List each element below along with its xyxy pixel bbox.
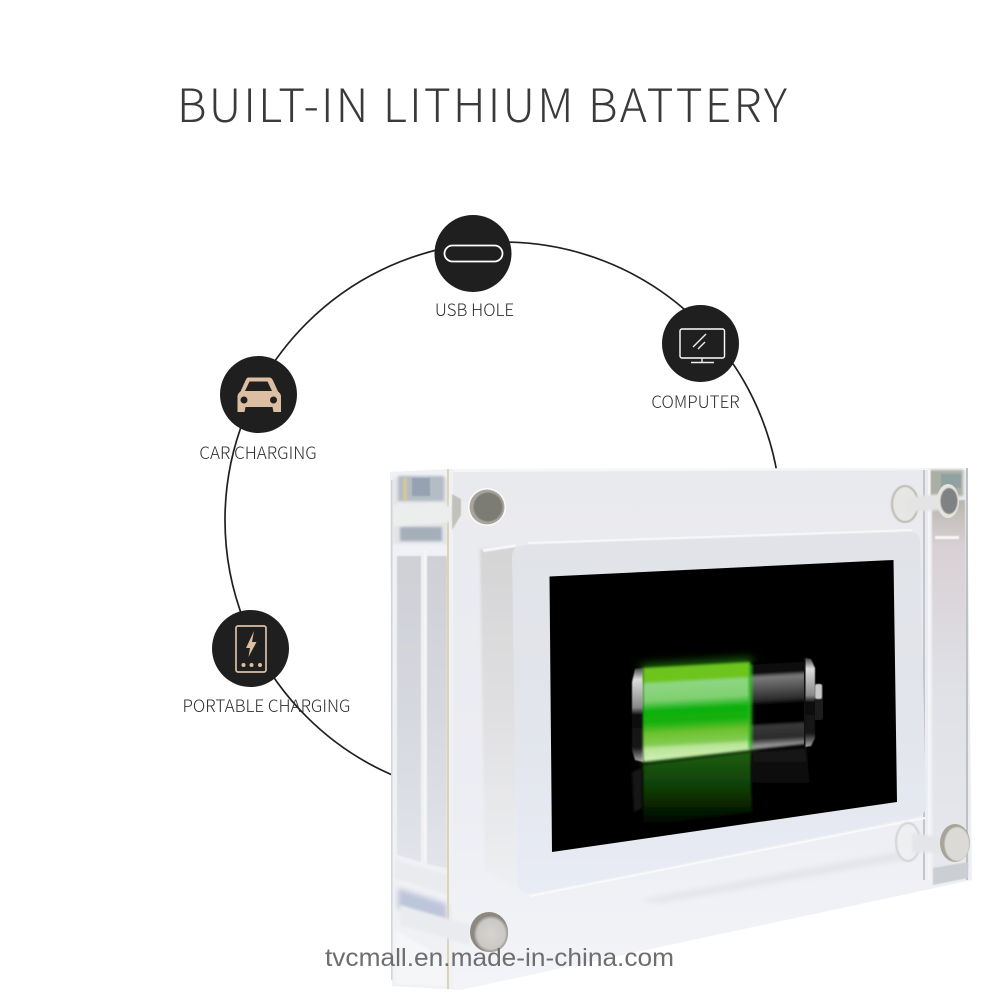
- right cap: [805, 658, 815, 747]
- screen: [550, 560, 897, 852]
- battery: [632, 658, 823, 826]
- bottom shelf shading: [640, 848, 920, 903]
- left edge columns: [391, 469, 449, 989]
- watermark: tvcmall.en.made-in-china.com: [325, 944, 674, 972]
- node: car charging: CAR CHARGING: [199, 439, 317, 464]
- magnet: top left: [396, 488, 506, 530]
- green fill: [643, 662, 750, 762]
- battery terminal: [815, 684, 823, 720]
- node: portable charging: PORTABLE CHARGING: [183, 692, 350, 717]
- magnet: bottom right: [896, 823, 970, 862]
- node: portable charging: [183, 610, 350, 717]
- frame top highlight: [453, 468, 967, 472]
- node: USB hole: USB HOLE: [435, 296, 514, 321]
- frame body: [390, 468, 972, 990]
- node: computer: [651, 305, 740, 413]
- grey empty section: [643, 659, 806, 762]
- magnet: bottom left: [400, 905, 508, 952]
- acrylic photo frame: [390, 468, 972, 990]
- right edge column: [923, 468, 969, 885]
- left cap: [632, 668, 643, 762]
- battery glow: [641, 658, 755, 764]
- display bezel: [512, 532, 926, 893]
- inner recess shadow: [480, 546, 516, 888]
- node: car charging: [199, 356, 317, 464]
- connection ring: [225, 242, 781, 798]
- battery reflection: [643, 752, 752, 826]
- title: BUILT-IN LITHIUM BATTERY: [177, 70, 787, 136]
- magnet: top right: [892, 484, 959, 522]
- node: computer: COMPUTER: [651, 388, 740, 413]
- node: USB hole: [434, 215, 514, 321]
